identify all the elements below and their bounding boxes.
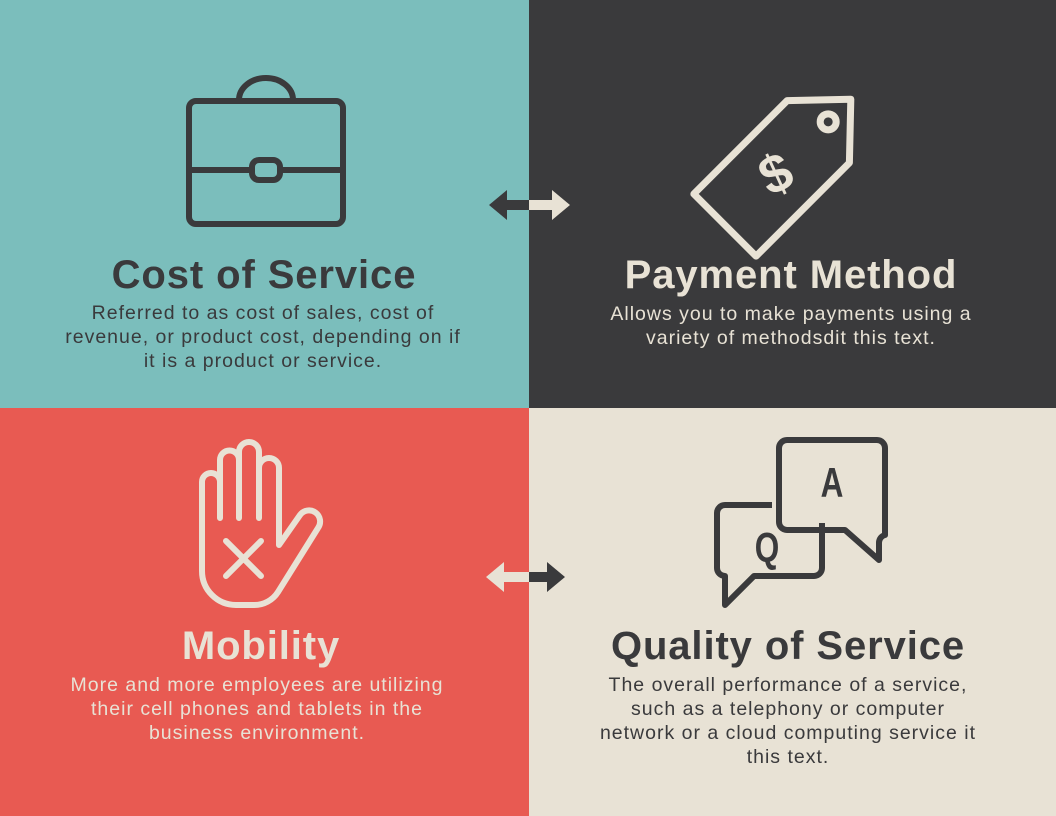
text: quality of service: network or a cloud computing service it — [600, 722, 976, 744]
text: payment method — [610, 303, 972, 349]
panel: payment method — [529, 0, 1056, 408]
arrow: bottom double arrow — [486, 562, 565, 592]
heading: payment method: Payment Method — [625, 253, 957, 297]
icon: Q and A speech bubbles: A — [821, 459, 843, 506]
panel: cost of service — [0, 0, 529, 408]
text: quality of service: this text. — [747, 746, 829, 768]
heading: mobility: Mobility — [182, 624, 340, 668]
icon: price tag — [694, 68, 882, 256]
text: mobility: More and more employees are utilizing — [70, 674, 444, 696]
icon: hand with x — [202, 442, 320, 605]
text: cost of service: Referred to as cost of sales, cost of — [92, 302, 434, 324]
text: payment method: variety of methodsdit this text. — [646, 327, 936, 349]
text: payment method: Allows you to make payments using a — [610, 303, 972, 325]
panel: quality of service — [529, 408, 1056, 816]
icon: Q and A speech bubbles: Q — [755, 524, 779, 571]
text: cost of service: revenue, or product cost, depending on if — [65, 326, 461, 348]
text: quality of service: such as a telephony or computer — [631, 698, 945, 720]
text: mobility — [70, 674, 444, 744]
heading: cost of service: Cost of Service — [112, 253, 416, 297]
text: mobility: their cell phones and tablets in the — [91, 698, 423, 720]
icon: Q and A speech bubbles — [717, 440, 885, 605]
panel: mobility — [0, 408, 529, 816]
text: mobility: business environment. — [149, 722, 365, 744]
text: quality of service: The overall performance of a service, — [609, 674, 967, 696]
heading: quality of service: Quality of Service — [611, 624, 965, 668]
icon: price tag: $ — [750, 141, 802, 208]
text: cost of service — [65, 302, 461, 372]
icon: briefcase — [189, 78, 343, 224]
text: quality of service — [600, 674, 976, 768]
text: cost of service: it is a product or service. — [144, 350, 382, 372]
arrow: top double arrow — [489, 190, 570, 220]
